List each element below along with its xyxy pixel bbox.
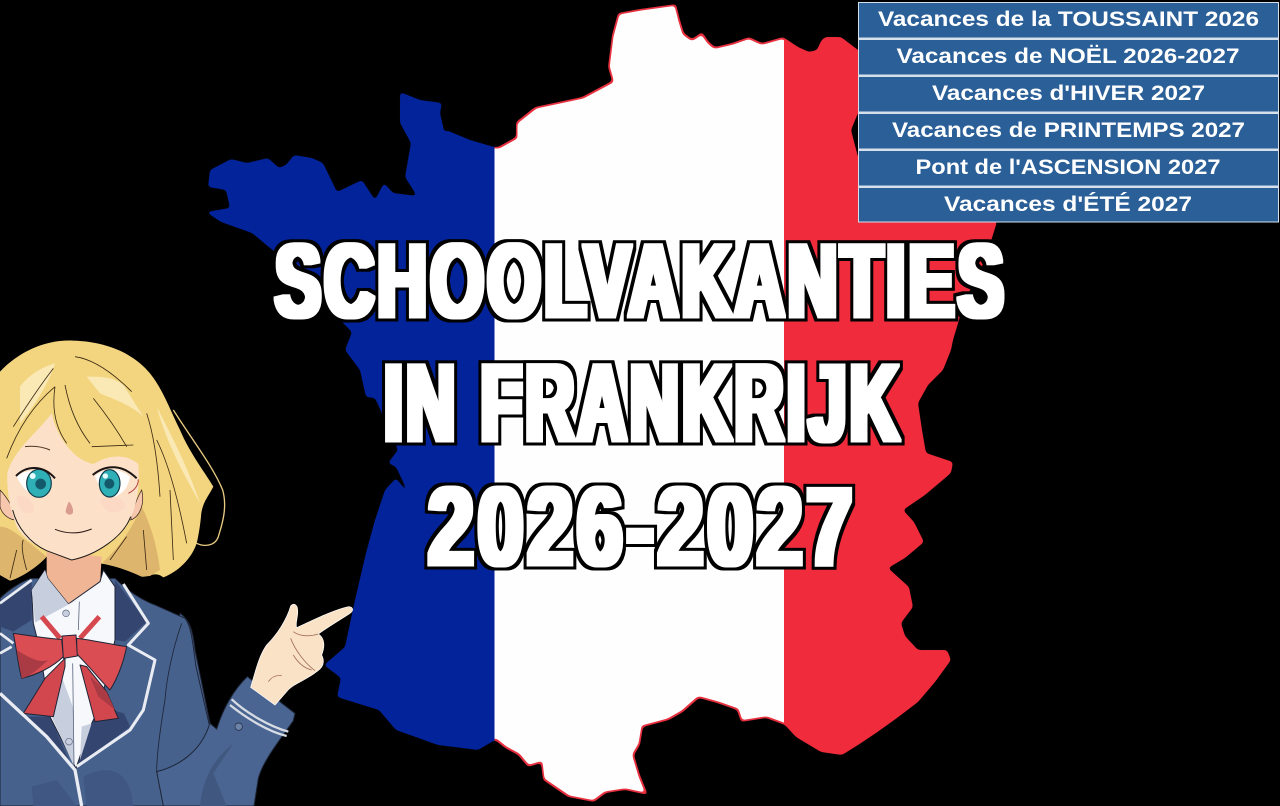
face	[7, 413, 139, 560]
menu item: Ete	[859, 188, 1278, 222]
shirt placket	[73, 602, 79, 765]
jacket body	[0, 578, 209, 806]
bow knot	[62, 635, 77, 658]
hair strands	[7, 357, 187, 578]
jacket dark lapels	[0, 580, 147, 767]
title: three lines	[275, 223, 1007, 589]
ribbon straps	[42, 617, 99, 638]
face outline jaw	[13, 510, 131, 560]
hair shadow lower	[0, 507, 160, 581]
lapel trim right	[77, 584, 155, 767]
back hair	[0, 341, 213, 581]
menu item: Toussaint	[859, 3, 1278, 38]
menu item: Ascension	[859, 151, 1278, 186]
sleeve shading	[167, 697, 233, 806]
left eye	[16, 446, 55, 497]
finger lines	[268, 632, 318, 682]
menu item: Hiver: Vacances d'HIVER 2027	[932, 81, 1205, 105]
sleeve button	[235, 723, 242, 730]
navigation menu table	[858, 2, 1279, 222]
title: three lines: 2026-2027	[428, 465, 856, 589]
jacket seam line	[157, 623, 182, 772]
loose hair strand	[173, 410, 225, 545]
shirt buttons	[63, 610, 72, 745]
shirt and collar	[32, 570, 115, 768]
title: three lines: IN FRANKRIJK	[384, 342, 902, 465]
left loop	[13, 633, 63, 678]
right loop	[77, 638, 127, 690]
menu item: Noel: Vacances de NOËL 2026-2027	[896, 44, 1240, 68]
hair highlights	[20, 363, 200, 503]
menu item: Printemps: Vacances de PRINTEMPS 2027	[892, 118, 1245, 142]
menu item: Toussaint: Vacances de la TOUSSAINT 2026	[878, 7, 1259, 31]
collar shade	[32, 570, 92, 765]
blush	[17, 496, 125, 513]
anime girl pointing at the map	[0, 341, 353, 806]
neck	[47, 550, 102, 605]
bow tie	[13, 617, 127, 722]
nose	[66, 502, 73, 515]
jacket sleeve and forearm	[157, 613, 295, 806]
menu item: Noel	[859, 40, 1278, 74]
menu item: Printemps	[859, 114, 1278, 148]
sleeve stripes	[230, 699, 288, 736]
menu item: Ascension: Pont de l'ASCENSION 2027	[916, 155, 1221, 179]
menu item: Ete: Vacances d'ÉTÉ 2027	[944, 191, 1192, 216]
ribbon tails	[23, 658, 118, 722]
menu item: Hiver	[859, 77, 1278, 112]
bow shadows	[17, 650, 115, 710]
mouth	[55, 529, 92, 533]
ears	[0, 490, 143, 520]
lapel trim left	[0, 693, 82, 806]
right eye	[93, 467, 138, 497]
map of France with tricolour flag	[200, 0, 1014, 806]
jacket lower shadow	[32, 770, 133, 806]
hand with pointing finger	[251, 604, 353, 705]
lapel trim upper left	[0, 580, 32, 653]
